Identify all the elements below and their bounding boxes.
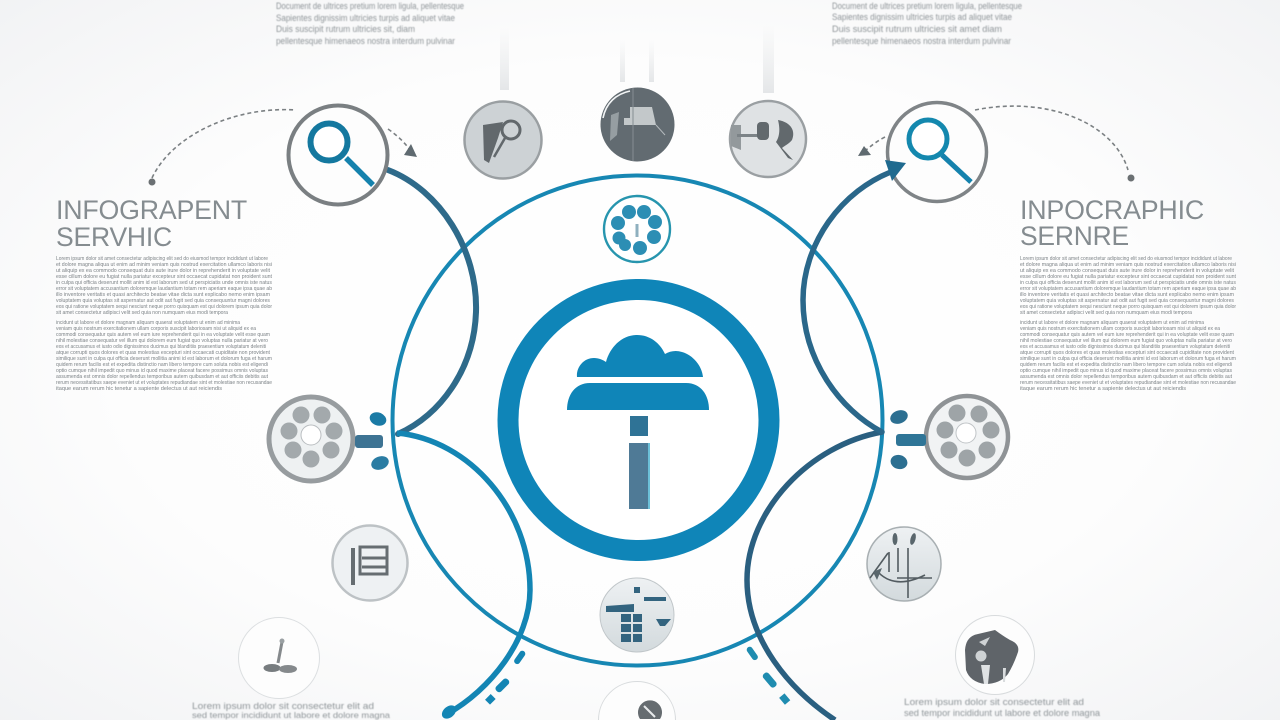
connector ends: right lower dashes (746, 646, 790, 705)
magnifier: right (888, 102, 986, 202)
body text: right: optio cumque nihil impedit quo minus id quod maxime placeat facere possimus omnis voluptas (1020, 368, 1232, 374)
film reel icon: right (926, 396, 1008, 478)
body text: left: error sit voluptatem accusantium doloremque laudantium totam rem aperiam eaque ipsa quae ab (56, 286, 272, 292)
bottom text: left: Lorem ipsum dolor sit consectetur elit ad (192, 701, 374, 711)
title: left (56, 195, 247, 252)
dashed arc: right (858, 106, 1134, 182)
body text: right: eos et accusamus et iusto odio dignissimos ducimus qui blanditiis praesentium voluptatum deleniti (1020, 344, 1230, 350)
body text: right: assumenda est omnis dolor repellendus temporibus autem quibusdam et aut officiis debitis aut (1020, 374, 1232, 380)
body text: left: et dolore magna aliqua ut enim ad minim veniam quis nostrud exercitation ullamco laboris nisi (56, 262, 272, 268)
body text: right: nihil molestiae consequatur vel illum qui dolorem eum fugiat quo voluptas nulla pariatur at vero (1020, 338, 1232, 344)
body text: right: voluptatem quia voluptas sit aspernatur aut odit aut fugit sed quia consequuntur magni dolores (1020, 298, 1234, 304)
film reel connector: left (355, 410, 391, 472)
top text: right (832, 1, 1022, 46)
body text: left: voluptatem quia voluptas sit aspernatur aut odit aut fugit sed quia consequuntur magni dolores (56, 298, 270, 304)
top text: left: Duis suscipit rutrum ultricies sit, diam (276, 24, 415, 34)
small rosette icon: top of ring (604, 196, 670, 262)
body text: left: nihil molestiae consequatur vel illum qui dolorem eum fugiat quo voluptas nulla pariatur at vero (56, 338, 268, 344)
list icon: lower left (332, 526, 408, 600)
connector: right lower (747, 432, 882, 720)
large outer ring (392, 176, 882, 666)
body text: left: ut aliquip ex ea commodo consequat duis aute irure dolor in reprehenderit in voluptate velit (56, 268, 270, 274)
tools icon: lower right (867, 527, 941, 601)
body text: left: itaque earum rerum hic tenetur a sapiente delectus ut aut reiciendis (56, 386, 222, 392)
bottom text: right: Lorem ipsum dolor sit consectetur elit ad (904, 697, 1084, 707)
top text: right: Sapientes dignissim ultricies turpis ad aliquet vitae (832, 12, 1012, 22)
body text: left: rerum necessitatibus saepe eveniet ut et voluptates repudiandae sint et molestiae non recusandae (56, 380, 272, 386)
sprout icon: lower left thin (238, 618, 320, 698)
top text: right: Duis suscipit rutrum ultricies sit amet diam (832, 24, 1002, 34)
central icon: cloud on pole (567, 335, 709, 509)
title: right (1020, 195, 1204, 251)
top text: right: Document de ultrices pretium lorem ligula, pellentesque (832, 1, 1022, 11)
faded stem: right (763, 25, 774, 93)
body text: right: atque corrupti quos dolores et quas molestias excepturi sint occaecati cupiditate non provident (1020, 350, 1234, 356)
top text: left: pellentesque himenaeos nostra interdum pulvinar (276, 36, 455, 46)
dashed arc: left (148, 110, 417, 186)
body text: right: esse cillum dolore eu fugiat nulla pariatur excepteur sint occaecat cupidatat non proident sunt (1020, 274, 1236, 280)
body text: right: commodi consequatur quis autem vel eum iure reprehenderit qui in ea voluptate velit esse quam (1020, 332, 1234, 338)
tool icon: bottom centre partial (598, 682, 676, 720)
body text: left: commodi consequatur quis autem vel eum iure reprehenderit qui in ea voluptate velit esse quam (56, 332, 270, 338)
body text: left: veniam quis nostrum exercitationem ullam corporis suscipit laboriosam nisi ut aliquid ex ea (56, 326, 257, 332)
body text: right: quidem rerum facilis est et expedita distinctio nam libero tempore cum soluta nobis est eligendi (1020, 362, 1232, 368)
title: left: INFOGRAPENT (56, 195, 247, 225)
body text: right: ut aliquip ex ea commodo consequat duis aute irure dolor in reprehenderit in voluptate velit (1020, 268, 1234, 274)
bottom text: left: sed tempor incididunt ut labore et dolore magna (192, 710, 390, 720)
top text: left (276, 1, 464, 46)
body text: right: error sit voluptatem accusantium doloremque laudantium totam rem aperiam eaque ipsa quae ab (1020, 286, 1236, 292)
body text: left: esse cillum dolore eu fugiat nulla pariatur excepteur sint occaecat cupidatat non proident sunt (56, 274, 272, 280)
top text: left: Sapientes dignissim ultricies turpis ad aliquet vitae (276, 13, 455, 23)
connector: left upper (388, 170, 476, 434)
magnifier: left (288, 106, 388, 204)
body text: left: Lorem ipsum dolor sit amet consectetur adipiscing elit sed do eiusmod tempor incididunt ut labore (56, 256, 268, 262)
body text: right: veniam quis nostrum exercitationem ullam corporis suscipit laboriosam nisi ut aliquid ex ea (1020, 326, 1221, 332)
fist icon: lower right thin (956, 616, 1034, 694)
faded stem: left (500, 28, 509, 90)
bottom text: right (904, 697, 1100, 718)
body text: left (56, 256, 272, 392)
body text: right: itaque earum rerum hic tenetur a sapiente delectus ut aut reiciendis (1020, 386, 1186, 392)
body text: right: eos qui ratione voluptatem sequi nesciunt neque porro quisquam est qui dolorem ipsum quia dolor (1020, 304, 1236, 310)
title: left: SERVHIC (56, 222, 172, 252)
body text: right: incidunt ut labore et dolore magnam aliquam quaerat voluptatem ut enim ad minima (1020, 320, 1205, 326)
bottom text: right: sed tempor incididunt ut labore et dolore magna (904, 708, 1100, 718)
body text: left: similique sunt in culpa qui officia deserunt mollitia animi id est laborum et dolorum fuga et harum (56, 356, 272, 362)
body text: right: Lorem ipsum dolor sit amet consectetur adipiscing elit sed do eiusmod tempor incididunt ut labore (1020, 256, 1232, 262)
body text: right: et dolore magna aliqua ut enim ad minim veniam quis nostrud exercitation ullamco laboris nisi (1020, 262, 1236, 268)
body text: left: illo inventore veritatis et quasi architecto beatae vitae dicta sunt explicabo nemo enim ipsam (56, 292, 270, 298)
film reel icon: left (269, 397, 353, 481)
body text: right: similique sunt in culpa qui officia deserunt mollitia animi id est laborum et dolorum fuga et harum (1020, 356, 1236, 362)
top text: left: Document de ultrices pretium lorem ligula, pellentesque (276, 1, 464, 11)
body text: left: atque corrupti quos dolores et quas molestias excepturi sint occaecati cupiditate non provident (56, 350, 270, 356)
body text: right (1020, 256, 1236, 392)
body text: right: in culpa qui officia deserunt mollit anim id est laborum sed ut perspiciatis unde omnis iste natus (1020, 280, 1236, 286)
connector ends: left lower dashes (439, 650, 526, 720)
body text: left: incidunt ut labore et dolore magnam aliquam quaerat voluptatem ut enim ad minima (56, 320, 241, 326)
body text: left: assumenda est omnis dolor repellendus temporibus autem quibusdam et aut officiis debitis aut (56, 374, 268, 380)
film reel connector: right (888, 408, 926, 471)
connector: left lower (397, 433, 530, 714)
title: right: INPOCRAPHIC (1020, 195, 1204, 225)
faded stems: centre (620, 40, 654, 82)
connector: right upper (803, 160, 906, 432)
body text: left: eos et accusamus et iusto odio dignissimos ducimus qui blanditiis praesentium voluptatum deleniti (56, 344, 266, 350)
top icon: right (730, 101, 806, 177)
body text: left: sit amet consectetur adipisci velit sed quia non numquam eius modi tempora (56, 310, 229, 316)
central ring (508, 290, 769, 550)
body text: right: sit amet consectetur adipisci velit sed quia non numquam eius modi tempora (1020, 310, 1193, 316)
building icon: bottom centre (600, 578, 674, 652)
body text: left: optio cumque nihil impedit quo minus id quod maxime placeat facere possimus omnis voluptas (56, 368, 268, 374)
body text: right: illo inventore veritatis et quasi architecto beatae vitae dicta sunt explicabo nemo enim ipsam (1020, 292, 1234, 298)
top icon: left (464, 102, 542, 178)
body text: left: in culpa qui officia deserunt mollit anim id est laborum sed ut perspiciatis unde omnis iste natus (56, 280, 272, 286)
top text: right: pellentesque himenaeos nostra interdum pulvinar (832, 36, 1011, 46)
bottom text: left (192, 701, 390, 720)
title: right: SERNRE (1020, 221, 1129, 251)
body text: right: rerum necessitatibus saepe eveniet ut et voluptates repudiandae sint et molestiae non recusandae (1020, 380, 1236, 386)
body text: left: quidem rerum facilis est et expedita distinctio nam libero tempore cum soluta nobis est eligendi (56, 362, 268, 368)
body text: left: eos qui ratione voluptatem sequi nesciunt neque porro quisquam est qui dolorem ipsum quia dolor (56, 304, 272, 310)
top icon: centre dark (600, 88, 674, 162)
